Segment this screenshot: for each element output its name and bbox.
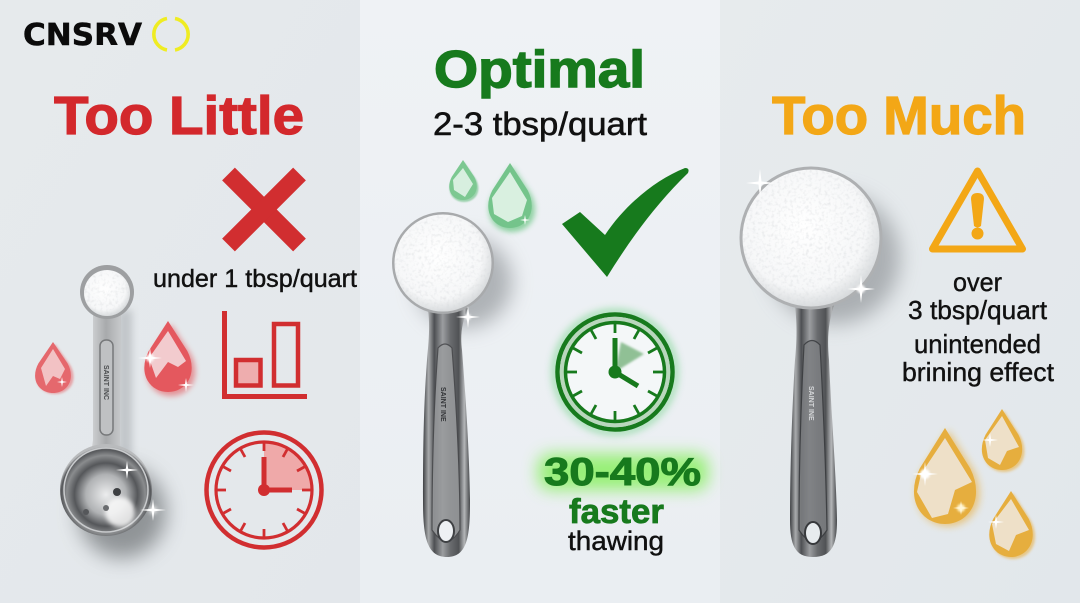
stat: 30-40% faster thawing — [538, 451, 708, 556]
text: over 3 tbsp per quart — [908, 267, 1048, 325]
logo: CNSRV — [23, 18, 143, 53]
panel: too little background — [0, 0, 360, 603]
icon: large gold drop — [912, 428, 979, 526]
text: unintended brining effect: unintended — [914, 329, 1041, 359]
text: 2-3 tbsp per quart: 2-3 tbsp/quart — [433, 106, 647, 142]
stat: 30-40% faster thawing: thawing — [568, 526, 664, 556]
icon: lower gold drop — [988, 491, 1035, 559]
icon: large green drop — [488, 163, 535, 232]
heading: too much: Too Much — [772, 86, 1026, 146]
panel: optimal background — [360, 0, 720, 603]
logo — [23, 18, 188, 53]
text: over 3 tbsp per quart: 3 tbsp/quart — [908, 295, 1048, 325]
icon: red bar chart — [224, 311, 307, 396]
stat: 30-40% faster thawing: faster — [569, 493, 664, 531]
icon: small red drop — [35, 342, 74, 394]
spoon: large measuring spoon heaped with salt — [740, 166, 900, 557]
spoon: small measuring spoon with empty bowl: SAINT INC — [102, 365, 109, 400]
icon: upper gold drop — [982, 409, 1024, 472]
icon: warning triangle — [932, 171, 1022, 249]
icon: large red drop — [138, 321, 195, 396]
spoon: large measuring spoon heaped with salt: SAINT INE — [807, 386, 814, 421]
heading: optimal: Optimal — [434, 41, 645, 99]
spoon: small measuring spoon with empty bowl — [60, 265, 166, 558]
text: unintended brining effect: brining effect — [902, 357, 1055, 387]
icon: small green drop — [449, 160, 478, 202]
stat: 30-40% faster thawing: 30-40% — [544, 451, 701, 494]
spoon: medium measuring spoon with salt: SAINT INE — [439, 387, 446, 422]
panel: too much background — [720, 0, 1080, 603]
icon: green clock with motion blur — [555, 312, 675, 432]
spoon: medium measuring spoon with salt — [392, 212, 512, 557]
icon: red cross — [228, 174, 300, 245]
text: under 1 tbsp per quart: under 1 tbsp/quart — [153, 265, 357, 293]
icon: red clock with quarter wedge — [206, 432, 322, 548]
text: over 3 tbsp per quart: over — [953, 267, 1002, 297]
icon: green check mark — [562, 168, 689, 277]
text: unintended brining effect — [902, 329, 1055, 387]
heading: too little: Too Little — [54, 86, 304, 146]
